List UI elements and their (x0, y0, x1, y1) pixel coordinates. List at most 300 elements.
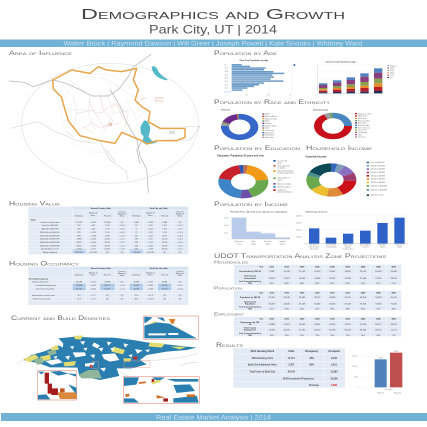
table: housing value: Margin of (176, 213, 185, 216)
table: housing value: $200,000 to $299,999 (40, 239, 60, 241)
table: employment: 74% (361, 335, 365, 337)
chart: Summit County population by age: 65 years + (390, 65, 398, 67)
table: population: 49,146 (299, 304, 306, 306)
table: employment: TAZ (248, 334, 253, 337)
table: employment: 77% (392, 335, 396, 337)
table: housing occupancy: +/-13.9 (147, 298, 154, 300)
map: area of influence (9, 54, 200, 193)
donut: household income: $75,000 to $99,999 (371, 181, 385, 184)
table: housing value: +/-1.7 (119, 239, 125, 241)
table: households: 2045 (376, 265, 381, 268)
table: results: Shortage (309, 385, 319, 387)
table: housing occupancy: (X) (163, 298, 166, 300)
table: population: 2045 (376, 291, 381, 294)
table: employment (234, 317, 401, 337)
chart: results bars: 10,000 (352, 366, 357, 368)
chart: income by education area: Bachelor's (264, 241, 272, 243)
table: housing value: +/-20,057 (89, 252, 97, 254)
donut: Summit County race: Other (358, 133, 363, 136)
table: population: 48% (346, 309, 350, 311)
chart: median earnings bars: years and over (309, 246, 319, 249)
table: housing value: 21 (135, 232, 137, 234)
table: housing value: 1.0% (162, 225, 167, 227)
table: employment: 51,046 (360, 324, 367, 326)
chart: Park City population by age: 50-54 (225, 74, 228, 76)
donut: education: Less than 9th (277, 159, 287, 162)
table: housing value: 15.9% (162, 242, 168, 244)
table: housing occupancy: 67.6% (162, 288, 168, 290)
table: households: 2025 (315, 266, 320, 268)
chart: income by education area: 15,000 (224, 218, 229, 220)
chart: Park City population by age: 0 (227, 94, 228, 96)
chart: median earnings bars: school graduate (326, 246, 336, 249)
table: results: Total Units at Build Out (249, 371, 275, 373)
chart: median earnings bars: graduate (345, 246, 351, 249)
table: population: Total County (244, 302, 256, 304)
table: households: 2020 (300, 266, 305, 268)
table: housing value: +/-413 (90, 222, 97, 224)
table: housing value: +/-1.3 (177, 232, 183, 234)
table: results: 17,071 (288, 358, 296, 360)
table: households: 59% (346, 283, 350, 285)
table: housing occupancy: Percent (177, 270, 184, 273)
table: population: 30,830 (329, 297, 336, 299)
table: employment: 2025 (315, 318, 320, 320)
donut: Park City race: Pacific Islander (265, 125, 277, 127)
table: population: 2010 (269, 292, 275, 294)
table: housing value: Error (91, 214, 96, 217)
table: households: 61% (330, 283, 335, 285)
table: housing occupancy: 48.1% (105, 285, 110, 287)
heading: UDOT projections: UDOT Transportation Analysis Zone Projections (214, 253, 386, 260)
table: housing occupancy: Error (178, 274, 183, 277)
table: households: 2015 (284, 266, 290, 268)
table: households: 2040 (361, 265, 366, 268)
chart: Summit County population by age: 5-17 (390, 75, 393, 77)
table: employment: 2040 (361, 317, 366, 320)
table: households: 68% (285, 283, 289, 285)
chart: income by education area: Private Fee: 25 and over based on education (231, 210, 287, 213)
donut: household income: $10,000 to $14,999 (371, 164, 385, 167)
chart: income by education area: 0 (227, 239, 228, 241)
donut: Park City race: Park City (221, 108, 231, 111)
table: housing occupancy: (X) (179, 298, 182, 300)
table: employment: 43,026 (329, 324, 336, 326)
table: households: 57% (361, 283, 365, 285)
table: employment: 2045 (376, 317, 381, 320)
table: housing occupancy: Percent (104, 273, 111, 276)
table: housing occupancy: Estimate (75, 273, 84, 276)
donut: education: degree (277, 180, 283, 182)
table: population: 47% (376, 309, 381, 311)
table: housing value: Error (178, 215, 183, 218)
donut: Summit County race: Some other race (358, 126, 370, 129)
label: population: Population (214, 286, 242, 290)
chart: results bars: 18,366 (394, 351, 398, 353)
table: population: 49% (330, 309, 335, 311)
donut: Park City race: White (265, 113, 270, 116)
table: housing value: Less than $50,000 (42, 225, 58, 227)
table: households: 23,107 (329, 278, 335, 280)
chart: Park City population by age (224, 59, 295, 96)
table: results: 2014 Housing Stock (251, 350, 275, 353)
table: housing value: +/-0.5 (119, 228, 125, 230)
table: housing value: 20.0% (105, 249, 110, 251)
table: housing value: Park City city, Utah (150, 207, 168, 210)
table: housing value: Margin of (118, 213, 127, 216)
table: housing occupancy: Error (91, 274, 96, 277)
table: population: Year (259, 292, 263, 294)
table: results: 2010 Existing Units (252, 358, 273, 360)
table: employment: 31,330 (269, 329, 276, 331)
table: population: 59% (270, 309, 274, 311)
table: housing value: +/-1.0 (177, 225, 183, 227)
table: employment: 78% (285, 335, 289, 337)
table: housing value: 6.8% (105, 235, 110, 237)
heading: results: Results (216, 343, 243, 349)
table: housing value: Percent (161, 214, 169, 217)
table: households: 13,987 (329, 271, 335, 273)
table: housing value: Owner-occupied units (40, 222, 60, 224)
table: results: 2,951 (331, 365, 338, 367)
table: housing value: +/-122 (90, 232, 96, 234)
table: housing value: Estimate (75, 214, 84, 217)
table: population: TAZ (248, 308, 253, 311)
donut: education: Graduate or (277, 189, 287, 192)
table: housing value: +/-252 (90, 249, 96, 251)
donut: Summit County race: Summit County (313, 108, 329, 111)
table: population: 2015 (284, 292, 290, 294)
table: housing occupancy: 29,088 (104, 281, 111, 283)
table: population: 67,108 (345, 304, 352, 306)
table: housing value: +/-1.3 (119, 235, 125, 237)
table: population: 2025 (315, 292, 320, 294)
chart: Summit County population by age: 0-4 (390, 77, 392, 79)
table: housing value: +/-81,587 (146, 252, 155, 254)
donut: Park City race: American Indian (265, 117, 277, 120)
chart: median earnings bars: degree (380, 246, 385, 249)
table: households: 14,855 (345, 271, 352, 273)
table: housing occupancy: (X) (121, 281, 124, 283)
table: households: 15,510 (360, 271, 367, 273)
table: housing value: 189 (135, 239, 139, 241)
donut: Summit County race: Two races (358, 137, 366, 139)
chart: Summit County population by age: 25-44 (390, 70, 394, 72)
table: housing value: Margin of (146, 212, 155, 215)
subtitle: Park City, UT | 2014 (149, 22, 277, 36)
table: housing occupancy: (X) (106, 298, 109, 300)
table: housing occupancy: +/-1.4 (119, 285, 125, 287)
donut: Summit County race: White alone (358, 115, 367, 118)
table: housing value: Summit County, Utah (91, 207, 111, 210)
chart: results bars (352, 351, 406, 394)
table: employment: 35,664 (299, 324, 306, 326)
table: housing occupancy: 10.9 (134, 295, 139, 297)
map: density (17, 316, 199, 403)
donut: Park City race: Some other (265, 136, 274, 139)
table: results: 8,226 (331, 358, 338, 360)
table: housing value: 1.1% (105, 228, 110, 230)
table: housing value: 30.9% (162, 245, 168, 247)
donut: education: Some college, no (277, 178, 290, 180)
table: population: 34,528 (375, 297, 382, 299)
table: housing value: 1.6% (105, 225, 110, 227)
table: housing occupancy: 13,988 (76, 285, 83, 287)
table: housing value: 580 (135, 245, 139, 247)
table: population: 32,510 (345, 297, 352, 299)
table: housing occupancy: +/-452 (90, 288, 96, 290)
table: housing occupancy: +/-1.7 (90, 295, 96, 297)
donut: education: grade (277, 162, 282, 164)
table: employment: 2050 (391, 318, 397, 320)
table: employment: 2015 (284, 318, 290, 320)
table: housing occupancy: 2,910 (134, 285, 140, 287)
table: housing value: Margin of (89, 212, 98, 215)
chart: median earnings bars: Graduate or (396, 244, 404, 247)
heading: housing value: Housing Value (9, 202, 60, 208)
table: housing value: Estimate (132, 214, 141, 217)
table: population: 2035 (345, 292, 351, 294)
donut: Park City race: White alone (265, 131, 274, 134)
table: housing value: 18 (135, 225, 138, 227)
map: area of influence: Downtown (155, 96, 164, 99)
heading: housing occupancy: Housing Occupancy (9, 262, 79, 268)
table: housing occupancy: Park City city, Utah (150, 267, 168, 270)
table: housing value: +/-196 (147, 222, 154, 224)
donut: education: Bachelor's degree (277, 186, 291, 188)
table: results (233, 348, 345, 388)
chart: income by education area: or less (237, 243, 242, 245)
table: housing occupancy: +/-233 (147, 285, 154, 287)
donut: education: Education: Population 25 years and over (217, 155, 264, 158)
table: households: 25,283 (345, 278, 352, 280)
chart: Summit County population by age: 45-64 (390, 68, 394, 70)
table: results: 3,357 (288, 365, 295, 367)
table: employment: 70% (315, 335, 320, 337)
donut: Park City race: Not Hispanic (265, 134, 275, 137)
chart: results bars: 0 (357, 387, 358, 389)
donut: education: Associate's degree (277, 182, 291, 185)
donut: Summit County race: American Indian (358, 119, 370, 122)
chart: median earnings bars: High school (344, 245, 353, 247)
table: employment: 69,234 (360, 329, 367, 331)
table: housing value: +/-4.3 (177, 242, 183, 244)
donut: Summit County race: Black alone (358, 118, 367, 120)
table: population: 48% (361, 309, 365, 311)
table: housing value: +/-64 (148, 235, 154, 237)
table: employment: 2010 (269, 318, 275, 320)
table: housing occupancy: Margin of (146, 271, 155, 274)
table: housing value: $150,000 to $199,999 (40, 235, 60, 237)
table: employment: 47,097 (345, 324, 351, 326)
table: housing value: +/-236 (90, 239, 97, 241)
table: housing occupancy: 51.9% (105, 288, 110, 290)
table: housing value: +/-0.6 (119, 225, 125, 227)
chart: Summit County population by age: Summit County Population by Age (326, 60, 356, 63)
donut: Summit County race: Not Hispanic (358, 131, 368, 134)
donut: Summit County race: Two or more (358, 130, 367, 132)
table: housing value: 878 (77, 235, 82, 237)
table: households: 63% (315, 283, 320, 285)
table: population: 2050 (391, 292, 397, 294)
table: housing value: 26.4% (105, 242, 110, 244)
label: households: Households (214, 260, 248, 264)
table: housing occupancy: Margin of (118, 272, 127, 275)
chart: Park City population by age: Park City Population by Age (240, 59, 269, 62)
table: housing occupancy: Margin of (176, 272, 185, 275)
table: housing value: $100,000 to $149,999 (40, 232, 60, 234)
table: housing value: $300,000 to $499,999 (40, 242, 60, 244)
table: housing value: (X) (179, 222, 182, 224)
table: population: Population by TAZ 34 (240, 297, 260, 299)
table: results: 48% (309, 357, 315, 360)
table: households: 70% (270, 283, 274, 285)
donut: Summit County race: Pacific Islander (358, 125, 370, 127)
table: employment: 56,105 (391, 324, 398, 326)
table: housing occupancy (28, 267, 188, 305)
chart: results bars: Projected (394, 391, 401, 394)
table: housing occupancy: Housing Occupancy (29, 278, 49, 280)
table: employment: 71% (346, 335, 350, 337)
table: housing value: 6.4% (162, 235, 167, 237)
table: housing occupancy: (X) (179, 281, 182, 283)
table: housing occupancy: +/-339 (147, 288, 154, 290)
chart: Park City population by age: 500 (267, 94, 270, 96)
table: housing occupancy: Rental vacancy rate (33, 298, 50, 300)
table: housing occupancy: (X) (106, 295, 109, 297)
table: population: Population (245, 303, 256, 306)
table: households: Total County (244, 276, 256, 278)
donut: education (217, 155, 294, 194)
table: households: 57% (376, 283, 381, 285)
table: employment: 72,771 (391, 329, 397, 331)
label: employment: Employment (214, 312, 244, 316)
donut: household income: $200,000 or more (371, 195, 384, 197)
table: households: 16,366 (391, 271, 398, 273)
table: housing value: +/-25 (148, 232, 154, 234)
table: households: 2050 (391, 266, 397, 268)
donut: household income: $150,000 to $199,999 (371, 188, 387, 191)
donut: household income: $25,000 to $34,999 (371, 171, 385, 174)
chart: median earnings bars: Population 25 (309, 244, 319, 247)
table: housing value: +/-168 (90, 235, 97, 237)
table: housing value: 1,880 (134, 222, 140, 224)
table: housing occupancy: +/-2.6 (177, 288, 183, 290)
table: housing value: 3,422 (77, 242, 81, 244)
table: housing value: (X) (121, 252, 124, 254)
table: households (234, 265, 401, 285)
table: housing value: 644 (135, 249, 139, 251)
donut: education: professional degree (277, 192, 292, 194)
heading: area of influence: Area of Influence (9, 51, 72, 57)
table: housing occupancy: 15,100 (76, 288, 83, 290)
table: housing occupancy: Homeowner vacancy rate (32, 295, 55, 297)
table: housing occupancy: 38.7 (134, 298, 138, 300)
table: housing value: 719,600 (133, 252, 141, 254)
table: housing occupancy: Percent (119, 270, 126, 273)
table: households: 64% (300, 283, 304, 285)
table: employment: 69,574 (375, 329, 382, 331)
table: population: 2030 (330, 292, 335, 294)
donut: Park City race: Asian (265, 120, 270, 123)
chart: Park City population by age: 250 (246, 94, 248, 96)
table: population: 35,126 (391, 297, 398, 299)
table: housing occupancy: Error (120, 274, 125, 277)
table: housing value: +/-67 (148, 239, 153, 241)
table: results: Occupancy (305, 350, 319, 353)
table: employment: % of County Growth by (239, 333, 261, 335)
donut: Park City race: Two or more (265, 130, 275, 132)
table: housing value: +/-91 (148, 242, 153, 244)
chart: results bars: Households (385, 389, 393, 391)
chart: income by education area (224, 210, 290, 245)
table: housing value: Median (dollars) (43, 252, 57, 254)
table: housing value: (X) (106, 252, 109, 254)
table: housing value: +/-0.9 (119, 232, 125, 234)
donut: household income: $15,000 to $24,999 (371, 168, 385, 171)
table: housing value: +/-115 (148, 249, 154, 251)
chart: income by education area: Some (251, 241, 256, 243)
table: employment: 40,926 (284, 329, 291, 331)
table: results: 20,443 (288, 370, 296, 373)
table: population: 51% (315, 309, 320, 311)
donut: household income: $35,000 to $49,999 (371, 174, 385, 177)
chart: income by education area: Graduate (279, 240, 286, 243)
table: housing occupancy: 8,988 (134, 281, 140, 283)
table: housing value: Percent (104, 214, 111, 217)
donut: household income: Household Income (306, 157, 327, 159)
table: housing occupancy: 4.3 (78, 295, 81, 297)
chart: Park City population by age: 30-34 (225, 81, 228, 83)
donut: Park City race: Black or African (265, 115, 277, 118)
table: housing occupancy: Estimate (132, 273, 141, 276)
table: housing occupancy: +/-422 (90, 285, 96, 287)
table: housing value: (X) (179, 252, 182, 254)
chart: median earnings bars: $60,000 (296, 215, 302, 217)
table: population: 73,660 (375, 304, 382, 306)
donut: Park City race: Other (265, 127, 270, 130)
donut: Summit County race: Hispanic or Latino (358, 112, 371, 115)
table: housing value: 2.9% (105, 232, 110, 234)
table: housing value: $50,000 to $99,999 (41, 228, 59, 230)
chart: median earnings bars: with earnings (310, 248, 319, 251)
table: households: 57% (392, 283, 396, 285)
table: housing occupancy: +/-1.4 (119, 288, 125, 290)
table: results: Units (288, 350, 295, 353)
table: households: 13,076 (314, 271, 321, 273)
chart: Park City population by age: 60-64 (225, 71, 228, 73)
table: employment: 31,901 (284, 324, 290, 326)
table: housing value: 139 (77, 228, 82, 230)
table: housing value: (X) (121, 222, 124, 224)
table: housing occupancy: (X) (121, 298, 124, 300)
chart: income by education area: 10,000 (224, 225, 229, 227)
table: housing value: 379 (77, 232, 82, 234)
table: results: 6,686 (331, 385, 338, 387)
table: population: % of County Growth by (239, 307, 261, 309)
table: housing occupancy: +/-317 (90, 281, 96, 283)
table: housing value: +/-135 (147, 245, 154, 247)
heading: population by age: Population by Age (214, 51, 277, 57)
table: results: Occupied (328, 350, 340, 353)
table: households: 11,745 (299, 271, 306, 273)
donut: Summit County race: Asian alone (358, 122, 367, 125)
donut: Park City race: Hispanic (265, 123, 272, 125)
table: housing occupancy: 8,988 (162, 281, 168, 283)
table: households: 27,980 (375, 278, 382, 280)
donut: education: no diploma (277, 167, 286, 169)
table: employment: 34 (249, 323, 252, 326)
